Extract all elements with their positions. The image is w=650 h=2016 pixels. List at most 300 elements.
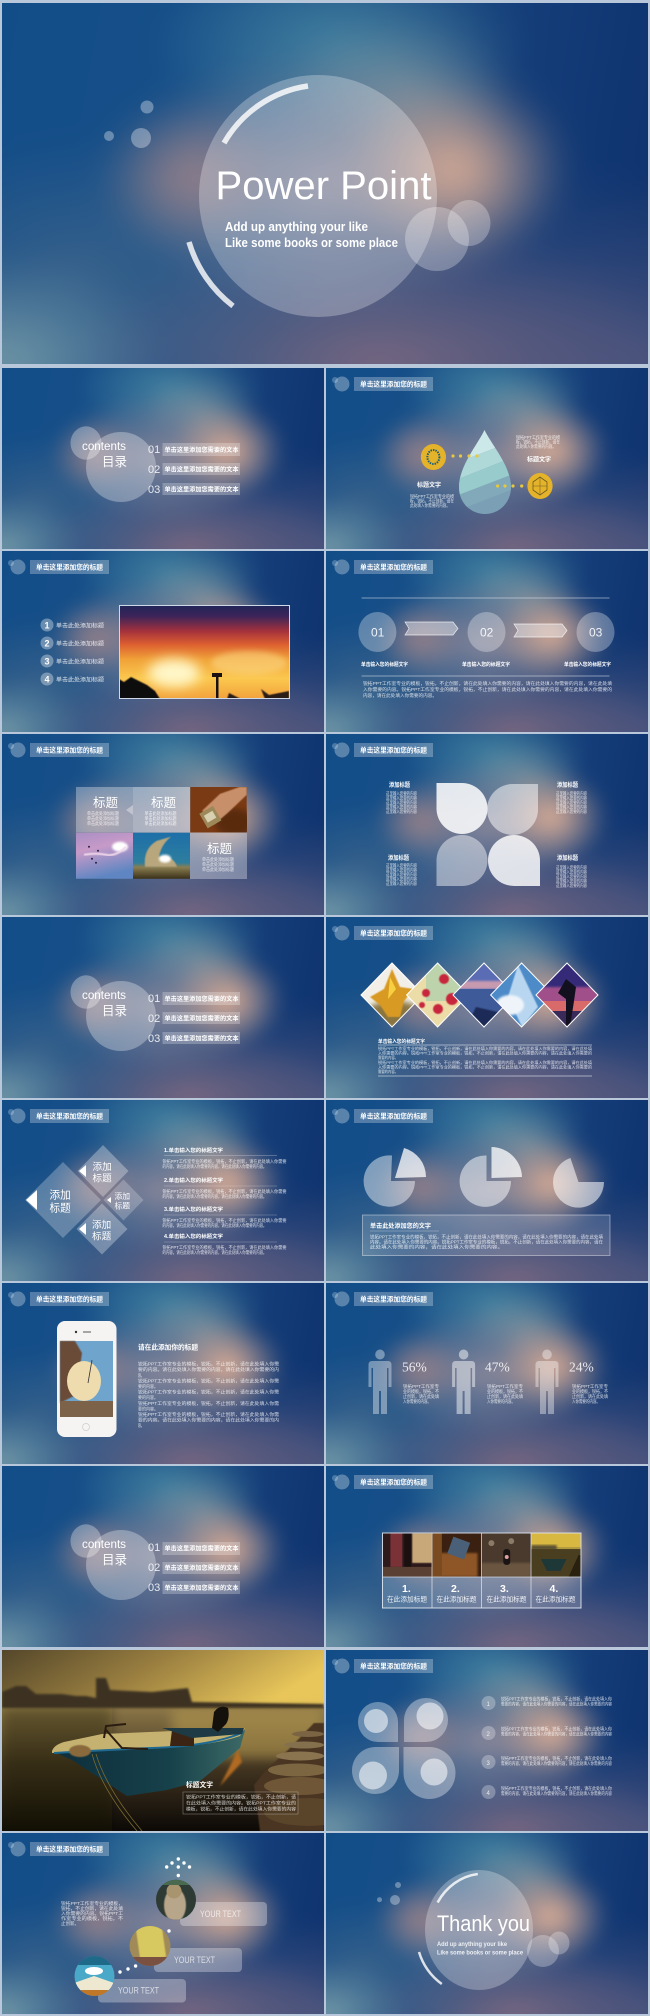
contents list: 02 [148,1562,160,1574]
step labels: 单击输入您的标题文字 [361,661,408,668]
description 1: 锐拓PPT工作室专 [403,1383,439,1390]
panel: photo grid slide [2,734,324,915]
panel: diamond list slide [2,1100,324,1281]
item 2: 需要的内容，请在此处填入你需要的内容，请在此处填入你需要的内容 [501,1730,613,1738]
header [332,1108,433,1124]
lower diamond: 添加 [92,1220,111,1231]
left label: 锐拓PPT工作室专业的模 [410,492,455,500]
description 2 [487,1383,524,1405]
step labels: 单击输入您的标题文字 [564,661,611,668]
small decorative dots [104,100,154,148]
item 2: 2 [486,1732,490,1738]
grid cell: title one: 单击此处添加标题 [87,810,120,817]
header [332,376,433,391]
list item 4 [162,1232,287,1256]
subtitle [225,220,398,250]
panel: three step process slide [326,551,648,732]
panel: contents slide 1 [2,368,324,548]
panel: thank you slide [326,1833,648,2014]
description 2: 止创新，请在此处填 [487,1393,524,1400]
lower diamond [76,1204,128,1254]
title: Power Point [216,164,432,208]
grid cell: title two [126,787,190,832]
panel: contents slide 2 [2,917,324,1098]
header: 单击这里添加您的标题 [36,1844,103,1854]
person 3 [536,1350,558,1414]
numbered list: 单击此处添加标题 [56,640,104,648]
label bottom left: 这里输入您要的内容 [386,880,418,887]
text block: 锐拓PPT工作室专业的模板，锐拓，不止创新，请在此处填入你需要的内容，请在此处填入你需要的内容，请在此处填 [378,1046,592,1051]
photo captions: 在此添加标题 [436,1594,477,1604]
contents list: 03 [148,484,160,496]
right label: 锐拓PPT工作室专业的模 [516,434,561,440]
text block: 入你需要的内容。锐拓PPT工作室专业的模板，锐拓，不止创新，请在此处填入你需要的内容，请在此处填入你需要的 [378,1064,592,1069]
label top left: 这里输入您要的内容 [386,808,418,815]
header: 单击这里添加您的标题 [360,1662,427,1670]
numbered list [40,618,104,686]
list item 1: 的内容。请在此处填入你需要的内容，请在此处填入你需要的内容。 [162,1163,266,1170]
list item 3: 的内容。请在此处填入你需要的内容，请在此处填入你需要的内容。 [162,1222,266,1229]
text box: 单击此处添加您的文字 [370,1222,431,1230]
panel: boat photo slide [2,1650,324,1831]
contents list [148,1542,240,1594]
list item 4: 4.单击输入您的标题文字 [164,1232,223,1240]
header [8,1842,109,1856]
item 4: 4 [486,1791,490,1797]
header [332,1658,433,1674]
label top right: 添加标题 [557,781,578,789]
caption: 锐拓PPT工作室专业的模板，锐拓，不止创新，请 [186,1794,297,1800]
photo diamond: sky and ice [490,962,544,1028]
grid cell: title one: 单击此处添加标题 [87,815,120,822]
label bottom right: 添加标题 [557,854,578,862]
grid cell: title three [190,832,247,879]
subtitle: Add up anything your like [437,1941,508,1948]
contents list: 03 [148,1582,160,1594]
top arc [438,1874,478,1902]
numbered list: 单击此处添加标题 [56,676,104,684]
header: 单击这里添加您的标题 [360,379,427,388]
caption: 标题文字 [186,1780,213,1789]
round photo: cat [156,1880,196,1920]
label bottom left: 这里输入您要的内容 [386,871,418,878]
contents list: 单击这里添加您需要的文本 [164,995,238,1003]
photo: hand with brush [190,787,247,832]
text block [61,1900,124,1927]
photo diamond: purple sunset [534,961,600,1031]
right label: 标题文字 [527,455,551,463]
contents list: 单击这里添加您需要的文本 [164,446,238,454]
phone text body: 要的内容。 [138,1406,158,1412]
photo captions: 4. [550,1583,558,1595]
photo captions: 在此添加标题 [536,1594,576,1604]
label top left [386,781,418,815]
step labels: 单击输入您的标题文字 [462,661,510,668]
list item 3: 锐拓PPT工作室专业的模板，锐拓，不止创新，请在此处填入你需要 [162,1217,287,1224]
large diamond: 添加 [50,1188,71,1202]
label bottom left [386,854,418,887]
label top left: 这里输入您要的内容 [386,799,418,806]
panel: people percentages slide [326,1283,648,1464]
phone text body: 要的内容。 [138,1394,158,1401]
subtitle: Add up anything your like [225,220,368,234]
step numbers: 02 [480,626,494,640]
grid cell: title one: 单击此处添加标题 [87,820,120,827]
top arc [224,86,308,143]
contents heading: contents [82,988,126,1002]
contents list: 01 [148,993,160,1005]
label top right [556,781,588,815]
photo captions: 2. [451,1583,460,1595]
pie chart 1 [364,1148,426,1207]
glass circle [425,1870,533,1990]
photo captions: 在此添加标题 [486,1594,527,1604]
contents heading [82,438,127,468]
text block: 止创新。 [61,1920,79,1927]
item 3: 需要的内容，请在此处填入你需要的内容，请在此处填入你需要的内容 [501,1760,613,1767]
header: 单击这里添加您的标题 [36,746,103,754]
numbered list: 3 [44,656,50,666]
label bottom left: 这里输入您要的内容 [386,862,418,869]
upper diamond [78,1145,128,1197]
description: 内容，请在此处填入你需要的内容。 [363,692,437,699]
step labels [361,661,611,668]
label bottom right: 这里输入您要的内容 [556,882,588,889]
text block: 需要的内容。 [378,1055,398,1060]
text block: 单击输入您的标题文字 [378,1038,425,1045]
step numbers: 03 [589,626,603,640]
header: 单击这里添加您的标题 [360,928,427,938]
label top right: 这里输入您要的内容 [556,794,588,802]
text box [362,1215,610,1256]
photo diamond: red flowers [406,962,461,1028]
label bottom left: 这里输入您要的内容 [386,876,418,882]
text block: 作室专业的模板，锐拓，不 [61,1915,124,1922]
left label: 标题文字 [417,480,441,488]
upper diamond: 标题 [92,1172,112,1184]
header: 单击这里添加您的标题 [36,1294,103,1304]
subtitle: Like some books or some place [225,236,398,250]
grid cell: title one: 标题 [93,796,119,810]
header [332,926,433,940]
phone text body: 要的内容。 [138,1383,158,1390]
right label: 此处填入你需要的内容。 [516,442,556,450]
item 4 [482,1785,613,1799]
four leaf shape [352,1698,456,1799]
header [8,1108,109,1124]
text box: 内容。请在此处填入你需要的内容。锐拓PPT工作室专业的模板，锐拓，不止创新，请在此处填入你需要的内容，请在 [370,1238,604,1246]
label top left: 这里输入您要的内容 [386,790,418,797]
grid cell: title two: 单击此处添加标题 [144,820,177,827]
panel: four petal slide [326,734,648,915]
photo diamond: maple leaf [360,962,415,1028]
contents list: 单击这里添加您需要的文本 [164,1584,238,1592]
step circles [358,612,614,652]
description 2: 业的模板，锐拓，不 [487,1388,524,1395]
photo 2 [432,1533,482,1577]
panel: four photos slide [326,1466,648,1647]
phone text body: 锐拓PPT工作室专业的模板，锐拓，不止创新，请在此处填入你需 [138,1400,280,1407]
panel: four leaf list slide [326,1650,648,1831]
text block: 锐拓PPT工作室专业的模板，锐拓，不止创新，请在此处填入你需要的内容，请在此处填入你需要的内容，请在此处填 [378,1060,592,1065]
contents heading [82,1537,127,1567]
decorative dots [377,1882,401,1905]
grid cell: title two: 单击此处添加标题 [144,810,177,817]
panel: pie charts slide [326,1100,648,1281]
description 1 [403,1383,440,1405]
left label: 此处填入你需要的内容。 [410,502,450,508]
header: 单击这里添加您的标题 [360,562,427,572]
right label: 板，锐拓，不止创新，请在 [516,438,561,445]
panel: sunset photo slide [2,551,324,732]
description 3: 锐拓PPT工作室专 [572,1383,608,1390]
contents list: 单击这里添加您需要的文本 [164,485,238,493]
right diamond: 添加 [114,1191,130,1201]
pill 2: YOUR TEXT [174,1955,215,1965]
text block: 入你需要的内容。锐拓PPT工 [61,1910,124,1917]
grid cell: title three: 单击此处添加标题 [202,866,235,873]
list item 3: 3.单击输入您的标题文字 [164,1205,223,1213]
text block [378,1038,592,1074]
contents heading: 目录 [102,454,127,468]
numbered list: 1 [44,620,50,630]
text block: 锐拓，不止创新，请在此处填 [61,1905,124,1912]
connecting dots [451,454,523,487]
photo: birds and pink sun [76,832,133,879]
percentage labels: 56% [402,1360,427,1374]
description 3 [572,1383,609,1405]
header: 单击这里添加您的标题 [36,562,103,572]
list item 1 [162,1146,287,1170]
label top left: 这里输入您要的内容 [386,804,418,810]
label bottom left: 添加标题 [388,854,409,862]
right label [516,434,561,463]
grid cell: title three: 单击此处添加标题 [202,861,235,868]
label bottom right: 这里输入您要的内容 [556,878,588,884]
caption: 模板，锐拓，不止创新，请在此处填入你需要的内容 [186,1806,297,1812]
item 3 [482,1755,613,1769]
pill 2 [154,1948,242,1972]
grid cell: title three: 标题 [207,842,233,856]
label bottom right: 这里输入您要的内容 [556,864,588,871]
caption [183,1780,298,1814]
right diamond: 标题 [114,1200,130,1210]
round photo: yellow note [130,1926,170,1966]
description 1: 止创新，请在此处填 [403,1393,440,1400]
phone text body: 锐拓PPT工作室专业的模板，锐拓，不止创新，请在此处填入你需 [138,1411,280,1418]
description 1: 入你需要的内容。 [403,1398,431,1405]
photo 3 [482,1534,531,1577]
header: 单击这里添加您的标题 [360,1112,427,1120]
contents list: 01 [148,444,160,456]
pill 1: YOUR TEXT [200,1909,241,1919]
left label: 板，锐拓，不止创新，请在 [410,497,455,504]
phone text body [138,1360,280,1429]
header: 单击这里添加您的标题 [360,1294,427,1304]
contents list [148,442,240,496]
header [332,1292,433,1306]
subtitle: Like some books or some place [437,1950,524,1956]
panel: cover slide [2,3,648,364]
caption: 在此处填入你需要的内容。锐拓PPT工作室专业的 [186,1800,296,1806]
header: 单击这里添加您的标题 [360,746,427,754]
label bottom right: 这里输入您要的内容 [556,868,588,876]
left label [410,480,455,508]
contents circles [70,426,156,502]
description 2: 入你需要的内容。 [487,1398,515,1405]
list item 4: 的内容。请在此处填入你需要的内容，请在此处填入你需要的内容。 [162,1249,266,1256]
list item 4: 锐拓PPT工作室专业的模板，锐拓，不止创新，请在此处填入你需要 [162,1244,287,1251]
item 2 [482,1726,613,1740]
contents heading: contents [82,438,126,452]
person 1 [368,1350,392,1414]
panel: contents slide 3 [2,1466,324,1647]
contents circles [70,975,156,1051]
text block: 锐拓PPT工作室专业的模板， [61,1900,123,1907]
contents list: 单击这里添加您需要的文本 [164,1564,238,1572]
text box: 锐拓PPT工作室专业的模板，锐拓，不止创新，请在此处填入你需要的内容，请在此处填入你需要的内容，请在此处填 [370,1234,604,1240]
header [332,560,433,574]
phone text body: 要的内容。请在此处填入你需要的内容，请在此处填入你需要的内 [138,1416,279,1424]
label bottom right [556,854,588,889]
description: 入你需要的内容。锐拓PPT工作室专业的模板，锐拓，不止创新，请在此处填入你需要的内容，请在此处填入你需要的 [363,686,612,693]
contents circles [70,1524,156,1600]
right diamond [104,1180,144,1220]
contents heading: contents [82,1537,126,1551]
list item 1: 锐拓PPT工作室专业的模板，锐拓，不止创新，请在此处填入你需要 [162,1158,287,1165]
chevron arrows [405,622,567,637]
large diamond: 标题 [50,1202,71,1214]
bottom arc [419,1952,442,1984]
phone text body: 要的内容。请在此处填入你需要的内容，请在此处填入你需要的内 [138,1366,279,1373]
label top right: 这里输入您要的内容 [556,804,588,810]
contents list: 单击这里添加您需要的文本 [164,1014,238,1022]
lower diamond: 标题 [92,1230,112,1242]
upper diamond: 添加 [92,1162,112,1173]
photo captions: 在此添加标题 [387,1594,427,1604]
label bottom right: 这里输入您要的内容 [556,873,588,880]
phone text body: 锐拓PPT工作室专业的模板，锐拓，不止创新，请在此处填入你需 [138,1378,280,1384]
grid cell: title two: 单击此处添加标题 [144,815,177,822]
photo 4 [531,1534,580,1577]
description 3: 止创新，请在此处填 [572,1393,609,1400]
person 2 [452,1350,475,1414]
description 2: 锐拓PPT工作室专 [487,1383,523,1390]
contents list: 02 [148,464,160,476]
header [332,742,433,758]
description: 锐拓PPT工作室专业的模板，锐拓，不止创新，请在此处填入你需要的内容，请在此处填入你需要的内容，请在此处填 [363,680,613,687]
panel: diamond photos slide [326,917,648,1098]
pill 3 [98,1979,186,2002]
label top left: 添加标题 [389,781,410,789]
item 4: 需要的内容，请在此处填入你需要的内容，请在此处填入你需要的内容 [501,1790,613,1797]
list item 1: 1.单击输入您的标题文字 [164,1146,223,1154]
header: 单击这里添加您的标题 [360,1478,427,1486]
icon: yellow circle left [421,444,446,470]
item 1: 锐拓PPT工作室专业的模板，锐拓，不止创新，请在此处填入你 [501,1696,613,1702]
photo diamond: blue sea [452,962,503,1028]
list item 2 [162,1176,287,1200]
water drop with stripes [459,430,511,514]
description [363,680,613,699]
contents heading: 目录 [102,1553,127,1567]
photo 1 [382,1533,432,1577]
header [332,1474,433,1490]
header [8,1292,109,1306]
dotted arrow [118,1857,191,1974]
phone text body: 锐拓PPT工作室专业的模板，锐拓，不止创新，请在此处填入你需 [138,1360,280,1368]
description 3: 业的模板，锐拓，不 [572,1388,609,1395]
petals [436,783,540,886]
phone text heading: 请在此添加你的标题 [138,1342,198,1352]
photo captions: 1. [402,1583,411,1595]
header [8,742,109,758]
overlapping circles [527,1932,570,1967]
item 3: 3 [486,1761,490,1767]
icon: yellow circle right [527,472,553,498]
phone text body: 锐拓PPT工作室专业的模板，锐拓，不止创新，请在此处填入你需 [138,1388,280,1396]
contents list: 01 [148,1542,160,1554]
percentage labels: 47% [485,1360,510,1374]
contents list: 02 [148,1013,160,1025]
photo captions [382,1533,581,1608]
panel: water drop slide [326,368,648,548]
step numbers [371,626,603,640]
list item 2: 的内容。请在此处填入你需要的内容，请在此处填入你需要的内容。 [162,1193,266,1200]
photo: oyster pearl [133,832,190,879]
numbered list: 2 [44,638,50,648]
item 2: 锐拓PPT工作室专业的模板，锐拓，不止创新，请在此处填入你 [501,1726,613,1732]
numbered list: 单击此处添加标题 [56,658,104,666]
overlapping circles [405,200,490,271]
subtitle [437,1941,524,1956]
item 4: 锐拓PPT工作室专业的模板，锐拓，不止创新，请在此处填入你 [501,1785,613,1792]
item 1: 需要的内容，请在此处填入你需要的内容，请在此处填入你需要的内容 [501,1700,613,1708]
description 3: 入你需要的内容。 [572,1398,600,1405]
grid cell: title two: 标题 [151,796,177,810]
description 1: 业的模板，锐拓，不 [403,1388,440,1395]
photo: boat at sunset [2,1650,352,1831]
percentage labels [402,1360,594,1374]
numbered list: 4 [44,674,50,684]
label top right: 这里输入您要的内容 [556,808,588,815]
percentage labels: 24% [569,1360,594,1374]
large diamond [25,1162,101,1238]
text block: 需要的内容。 [378,1069,398,1074]
list item 2: 2.单击输入您的标题文字 [164,1176,223,1184]
panel: phone slide [2,1283,324,1464]
photo: sunset [119,605,290,699]
numbered list: 单击此处添加标题 [56,622,104,630]
contents list: 单击这里添加您需要的文本 [164,465,238,473]
bottom arc [189,242,233,306]
panel: round photos slide [2,1833,324,2014]
list item 3 [162,1205,287,1229]
contents list: 03 [148,1033,160,1045]
large glass circle [199,75,437,317]
pie chart 3 [553,1158,604,1208]
item 1 [482,1696,613,1710]
text box: 此处填入你需要的内容，请在此处填入你需要的内容。 [370,1244,503,1250]
label top right: 这里输入您要的内容 [556,790,588,797]
contents list: 单击这里添加您需要的文本 [164,1544,238,1552]
item 1: 1 [486,1702,490,1708]
grid cell: title three: 单击此处添加标题 [202,856,235,863]
phone text body: 容。 [138,1372,144,1379]
label top left: 这里输入您要的内容 [386,794,418,802]
header: 单击这里添加您的标题 [36,1112,103,1120]
pill 3: YOUR TEXT [118,1986,159,1996]
